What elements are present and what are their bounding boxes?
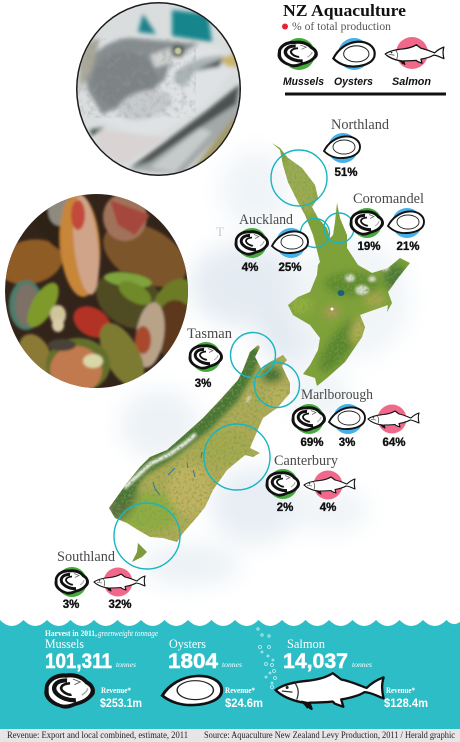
region: Southland: 32%: [108, 599, 132, 611]
region: Southland: Southland: [57, 549, 115, 565]
region: Marlborough: 64%: [382, 437, 406, 449]
stat: mussels: Mussels: [45, 636, 84, 651]
stat: salmon: $128.4m: [384, 696, 428, 710]
region: Marlborough: Marlborough: [301, 387, 373, 403]
footer: Revenue: Export and local combined, estimate, 2011: [7, 731, 188, 741]
region circle: Coromandel: [324, 213, 354, 243]
region circle: Canterbury: [204, 424, 270, 490]
stat: oysters: $24.6m: [225, 696, 263, 710]
legend rule: [285, 92, 446, 96]
stewart island: [132, 543, 147, 562]
region: Coromandel: Coromandel: [353, 191, 424, 207]
south island: [109, 345, 290, 542]
legend: salmon: [385, 37, 444, 88]
stat: salmon: tonnes: [352, 660, 372, 669]
stat: oysters: Oysters: [169, 636, 206, 651]
stat: oysters: Revenue*: [225, 686, 255, 695]
panel: harvest in 2011: [0, 620, 460, 729]
water band with scalloped top: [0, 620, 460, 729]
region: Auckland: 25%: [278, 262, 302, 274]
stat: mussels: $253.1m: [100, 696, 142, 710]
region: Coromandel: 19%: [357, 241, 381, 253]
stat: oysters: 1804: [168, 650, 218, 673]
stat: salmon: [276, 636, 428, 710]
region: Canterbury: [266, 453, 355, 514]
legend: oysters: Oysters: [334, 76, 373, 88]
legend: salmon: Salmon: [392, 76, 431, 88]
legend: mussels: Mussels: [283, 76, 324, 88]
photo: salmon: [76, 2, 241, 176]
region circle: Tasman: [230, 332, 276, 378]
map: New Zealand: [100, 135, 415, 585]
stat: salmon: Salmon: [287, 636, 325, 651]
region: Canterbury: 4%: [320, 502, 336, 514]
region circle: Auckland: [300, 218, 330, 248]
region: Auckland: [234, 212, 308, 274]
region: Auckland: 4%: [242, 262, 258, 274]
region: Marlborough: 3%: [339, 437, 355, 449]
region: Coromandel: 21%: [396, 241, 420, 253]
stat: mussels: tonnes: [116, 660, 136, 669]
stat: salmon: 14,037: [283, 650, 348, 673]
region: Marlborough: 69%: [300, 437, 324, 449]
legend subtitle: % of total production: [292, 21, 391, 33]
faint map letter: T: [216, 224, 224, 239]
region circle: Southland: [114, 503, 180, 569]
stat: mussels: 101,311: [45, 650, 112, 673]
region: Southland: [54, 549, 145, 611]
region circle: Northland: [271, 150, 327, 206]
region: Canterbury: Canterbury: [274, 453, 338, 469]
region: Southland: 3%: [63, 599, 79, 611]
region: Tasman: Tasman: [187, 326, 232, 342]
region: Coromandel: [350, 191, 424, 253]
legend: oysters: [333, 38, 375, 88]
region circle: Marlborough: [254, 362, 300, 408]
footer: [0, 729, 460, 742]
harvest sub-heading: greenweight tonnage: [98, 629, 158, 638]
stat: salmon: Revenue*: [386, 686, 415, 695]
region: Tasman: [187, 326, 232, 390]
title: NZ Aquaculture: [283, 1, 406, 20]
legend: mussels: [278, 38, 324, 88]
stat: oysters: [162, 636, 263, 710]
stat: oysters: tonnes: [222, 660, 242, 669]
region: Northland: Northland: [331, 117, 389, 133]
region: Auckland: Auckland: [239, 212, 293, 228]
north island: [272, 143, 410, 386]
bubbles: [257, 628, 276, 688]
clouds: [120, 150, 410, 585]
harvest heading: Harvest in 2011,: [45, 628, 97, 638]
photo: mussels: [5, 194, 188, 388]
region: Tasman: 3%: [195, 378, 211, 390]
region: Canterbury: 2%: [277, 502, 293, 514]
region: Northland: 51%: [334, 167, 358, 179]
stat: mussels: Revenue*: [101, 686, 131, 695]
region: Northland: [324, 117, 389, 179]
stat: mussels: [44, 636, 142, 710]
region: Marlborough: [292, 387, 419, 449]
